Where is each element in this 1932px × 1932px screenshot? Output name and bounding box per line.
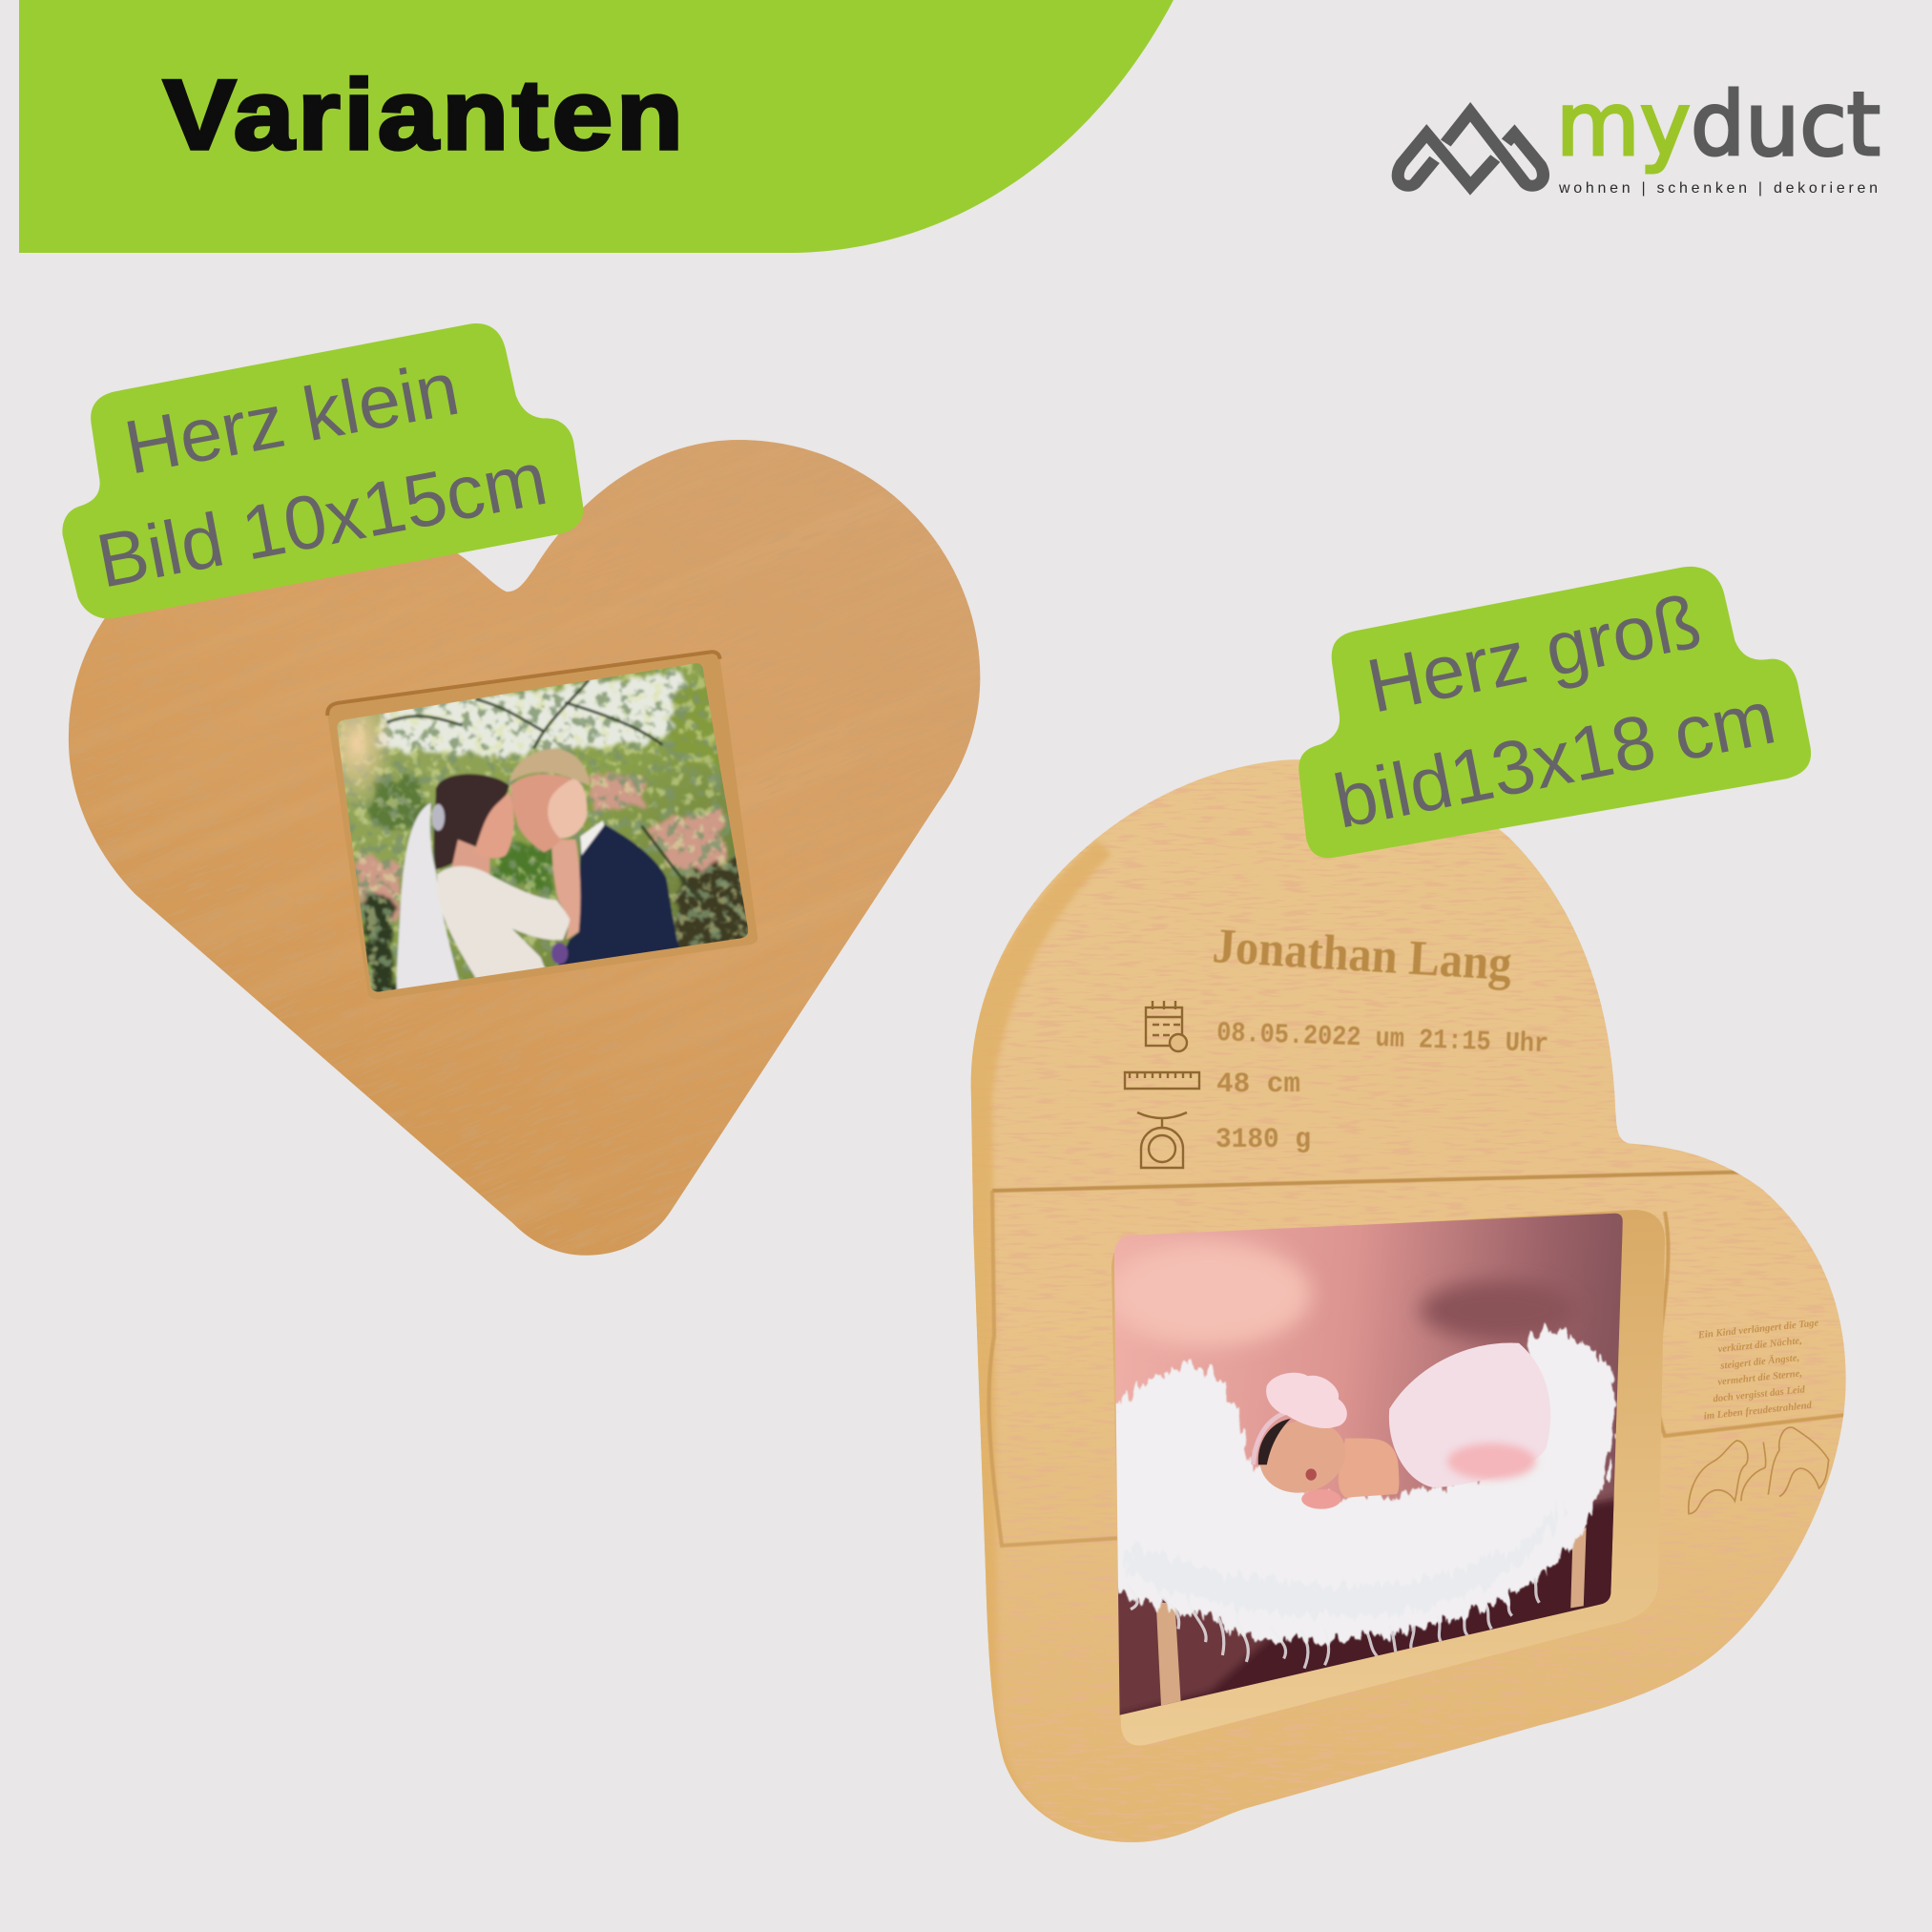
label text line 1: Herz klein <box>118 345 466 490</box>
recess <box>1111 1210 1665 1746</box>
label text line 2: Bild 10x15cm <box>91 435 553 604</box>
bed legs <box>1156 1527 1587 1709</box>
label text line 2: bild13x18 cm <box>1327 674 1782 844</box>
groom face <box>510 774 575 852</box>
icon: mountains <box>1398 112 1543 186</box>
baby head <box>1249 1409 1356 1505</box>
recess <box>327 652 758 999</box>
label: Herz groß <box>1298 567 1811 858</box>
wordmark: myduct <box>1556 73 1880 176</box>
photo <box>1107 1212 1641 1737</box>
engraving: verse: vermehrt die Sterne, <box>1717 1368 1803 1388</box>
flower <box>551 943 568 965</box>
tutu <box>1389 1342 1550 1487</box>
engraving: verse: doch vergisst das Leid <box>1713 1384 1806 1404</box>
engraving: lambs <box>1689 1427 1829 1514</box>
fur strands <box>1127 1576 1539 1669</box>
hair ornament <box>432 804 445 831</box>
wooden heart body <box>69 440 981 1256</box>
label text line 1: Herz groß <box>1361 578 1708 729</box>
panel: small heart <box>62 323 981 1256</box>
leaves <box>340 664 747 991</box>
engraving: verse: Ein Kind verlängert die Tage <box>1696 1318 1819 1341</box>
photo <box>337 663 748 992</box>
hand <box>1301 1489 1341 1509</box>
bride arm <box>551 840 580 940</box>
engraving: verse: verkürzt die Nächte, <box>1717 1336 1802 1355</box>
groom hair <box>509 749 590 785</box>
engraving: weight: 3180 g <box>1215 1124 1311 1156</box>
title: Varianten <box>163 60 687 171</box>
dress <box>437 866 571 980</box>
engraving: verse: im Leben freudestrahlend <box>1703 1401 1813 1423</box>
sky and foliage <box>353 671 751 995</box>
icon: ruler <box>1125 1072 1199 1089</box>
baby body <box>1339 1438 1399 1498</box>
grooves <box>989 1172 1846 1546</box>
engraving: name: Jonathan Lang <box>1211 919 1513 991</box>
photo frame and baby photo <box>1107 1210 1665 1746</box>
collar <box>580 821 604 856</box>
baby hair <box>1258 1419 1291 1465</box>
engraving: birth date: 08.05.2022 um 21:15 Uhr <box>1216 1017 1549 1060</box>
floor <box>1107 1494 1641 1737</box>
icon: calendar <box>1146 1001 1187 1051</box>
icon: scale <box>1137 1112 1187 1168</box>
tagline: wohnen | schenken | dekorieren <box>1558 180 1878 197</box>
label: Herz klein <box>62 323 583 618</box>
side edge <box>971 840 1111 1817</box>
veil <box>397 803 460 991</box>
bride hair <box>433 774 509 870</box>
panel: large heart <box>954 567 1870 1870</box>
recess shadow edge <box>327 652 720 716</box>
wooden heart body <box>954 744 1870 1870</box>
fur <box>1107 1330 1618 1641</box>
engraving: verse: steigert die Ängste, <box>1719 1351 1800 1372</box>
logo <box>1398 73 1880 197</box>
hand <box>548 779 587 839</box>
photo frame and couple photo <box>318 649 763 1002</box>
bride face and neck <box>451 840 489 875</box>
engraving: length: 48 cm <box>1216 1069 1300 1101</box>
flower <box>1266 1373 1347 1428</box>
headband <box>1254 1412 1287 1465</box>
header banner <box>19 0 1174 253</box>
groom suit <box>556 824 680 969</box>
baby mouth <box>1305 1468 1317 1481</box>
engraving: verse <box>1696 1318 1819 1423</box>
branches <box>388 680 703 904</box>
